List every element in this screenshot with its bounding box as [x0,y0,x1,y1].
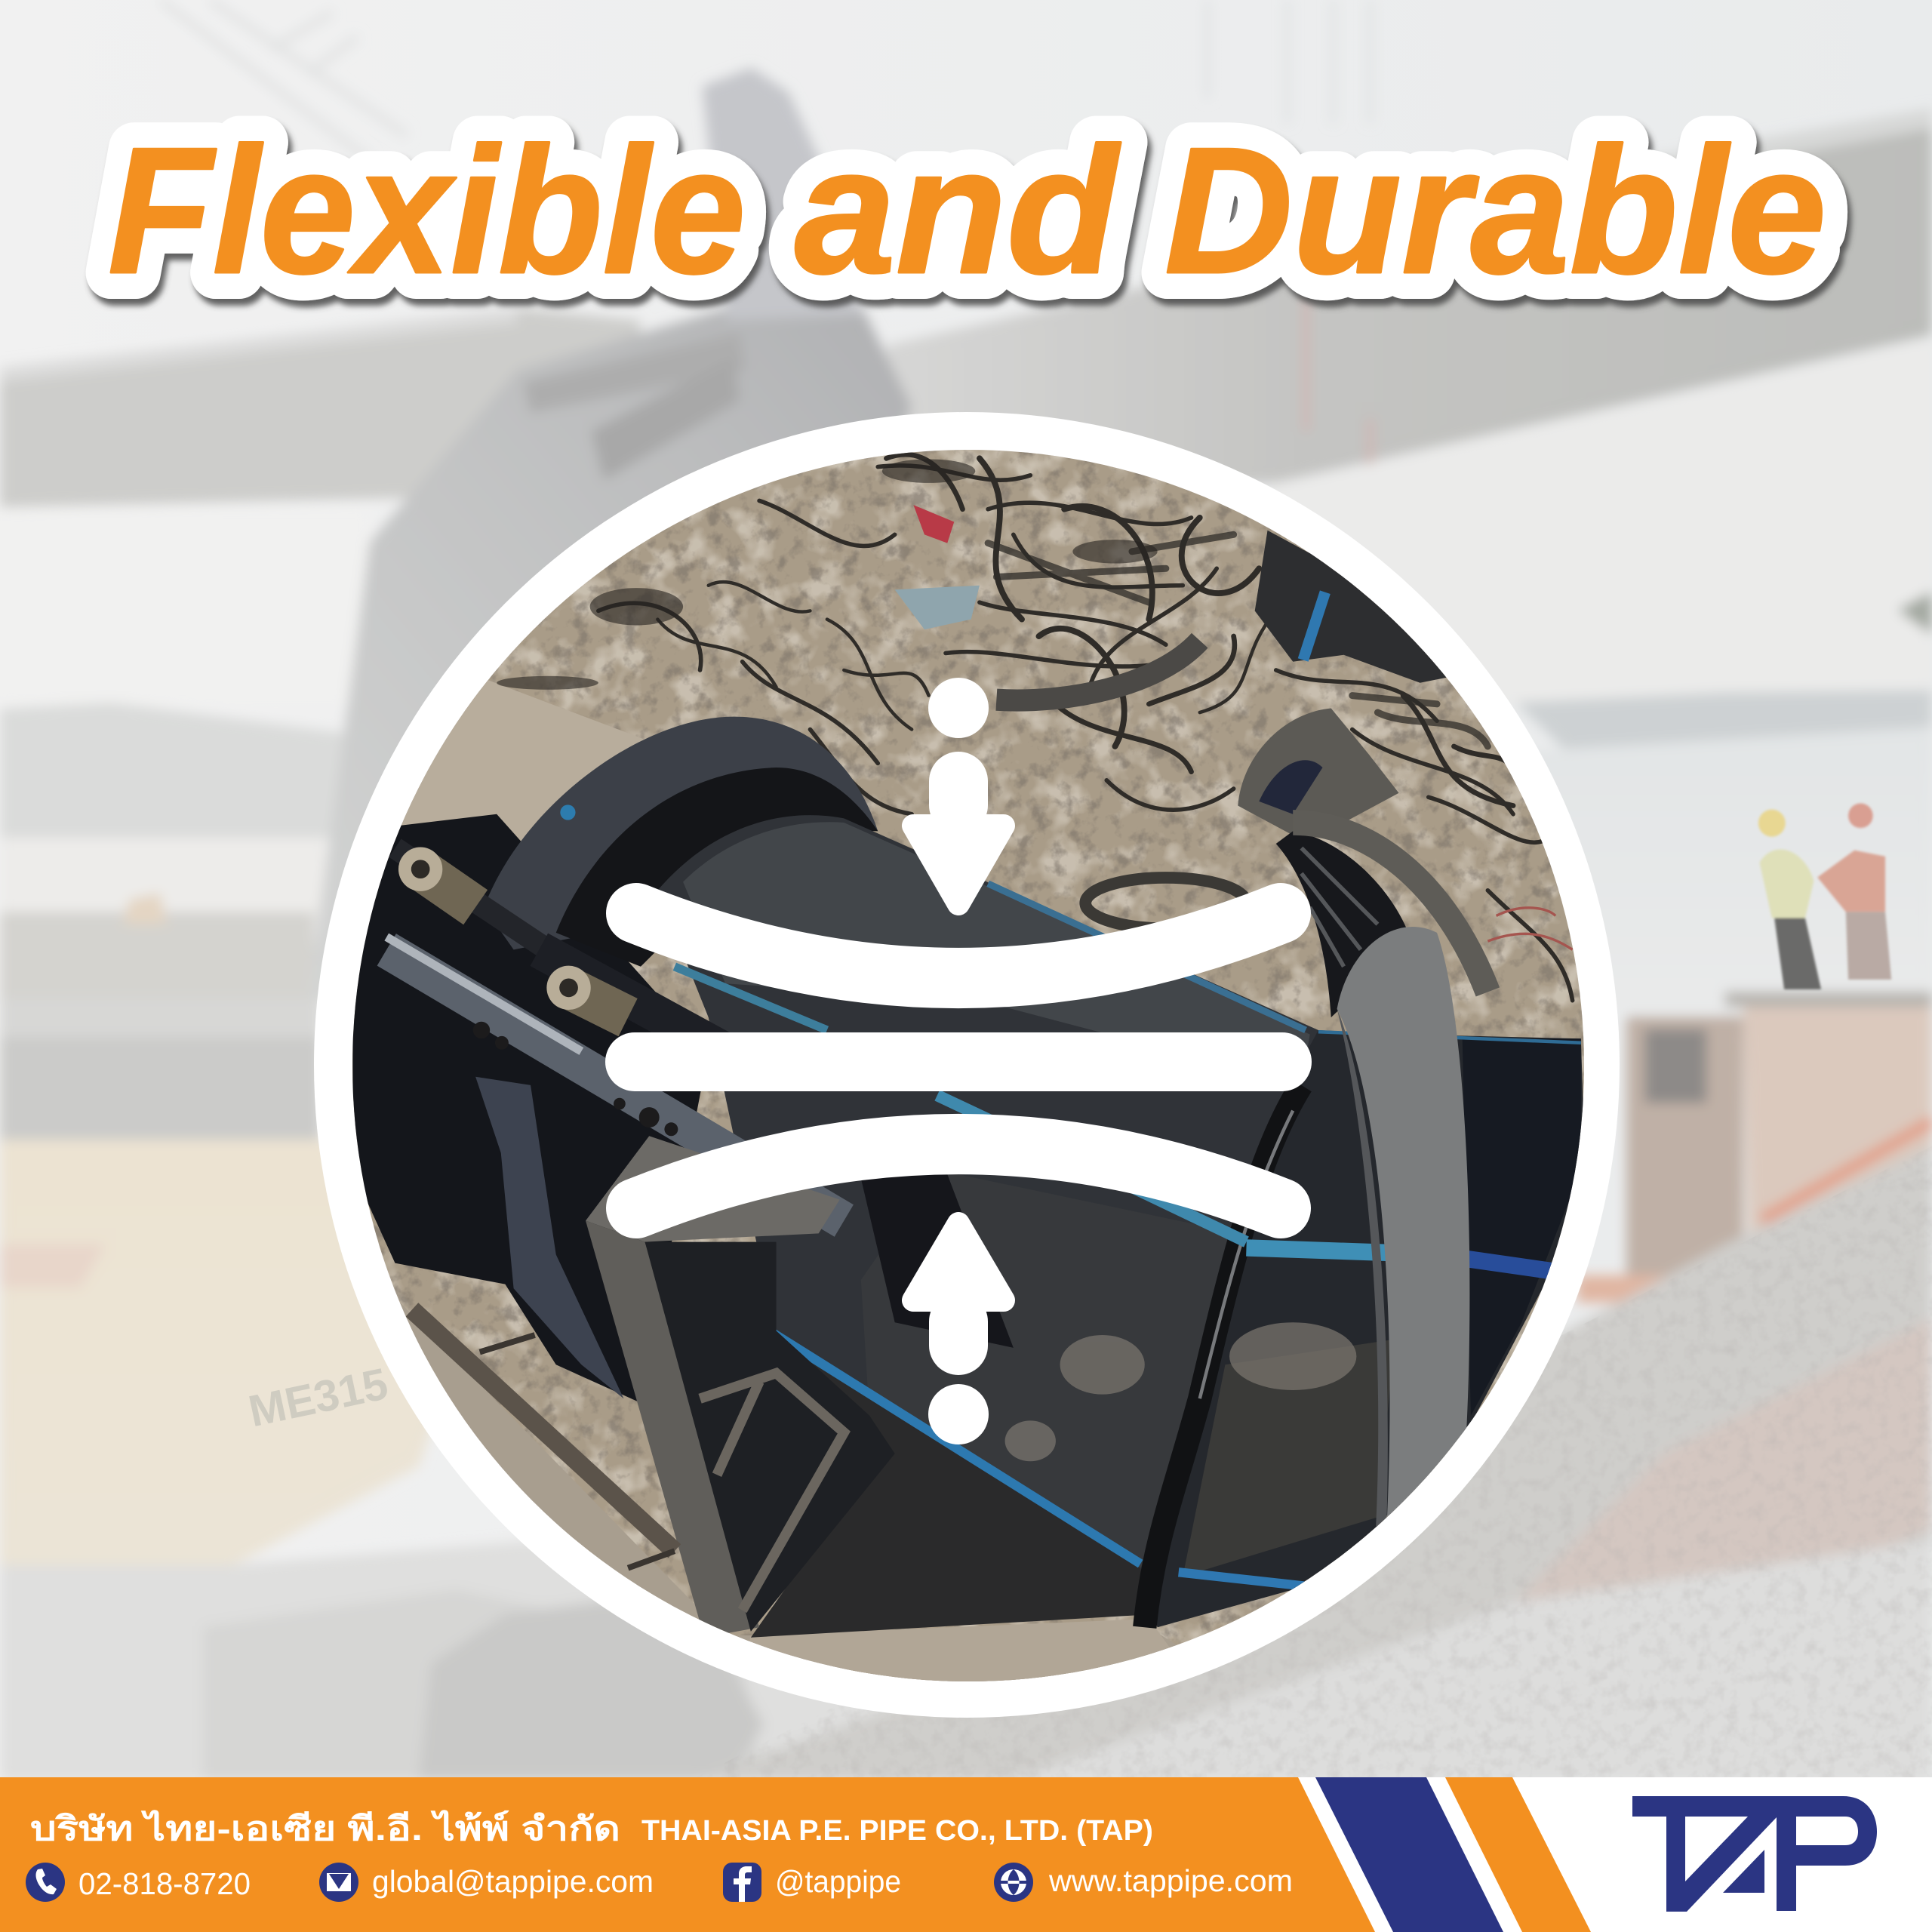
title: Flexible and Durable [108,111,1826,311]
blue-grey bag [895,586,980,629]
pipe underside and shadow [751,1335,1149,1638]
rail holes [473,1022,678,1136]
coil top right [1255,531,1463,683]
title: Flexible and Durable: and [795,111,1121,311]
title: Flexible and Durable: and [795,111,1121,311]
navy stripe [1315,1777,1503,1932]
title: Flexible and Durable: Flexible [108,111,746,311]
scattered wires [598,454,1573,1001]
excavator cab [0,998,321,1152]
gravel slope [690,1146,1932,1780]
phone: 02-818-8720 [78,1866,251,1901]
crane lattice [160,0,1371,160]
dirt clumps [497,459,1158,690]
right bridge [888,109,1932,493]
weld bead [1145,1085,1301,1627]
company name: THAI-ASIA P.E. PIPE CO., LTD. (TAP) [641,1815,1153,1847]
logo: TAP [1632,1796,1877,1912]
facebook [723,1863,901,1902]
phone [26,1863,251,1902]
rod on ground [412,1309,675,1551]
bolts [398,848,628,1017]
workers [1758,804,1891,989]
orange band [0,1777,1375,1932]
website: www.tappipe.com [1048,1863,1293,1898]
ring on ground [1085,878,1246,928]
circle white ring [314,412,1620,1718]
icon: compression symbol [605,678,1312,1444]
company name [30,1809,1153,1847]
black drum left end [352,814,709,1403]
blue stripes [675,884,1581,1586]
email: global@tappipe.com [372,1864,654,1899]
far shore right [1515,690,1932,761]
text on excavator body: ME315 [245,1359,392,1436]
arrow pointing up [913,1223,1004,1375]
top curved bar [636,913,1281,978]
middle straight bar [605,1032,1312,1091]
pale slab [398,680,643,841]
gravel texture [690,1146,1932,1780]
tree [1897,592,1932,635]
sky right [1269,339,1932,705]
lower frame [586,1136,840,1242]
title: Flexible and Durable: Flexible [108,111,746,311]
machine [1743,998,1932,1244]
dark bracket [861,1170,1014,1348]
circular photo: HDPE pipe fusion machine [352,450,1584,1681]
second pipe [1140,1030,1585,1627]
grey flange disc [1337,927,1469,1538]
curved ring [996,641,1200,700]
dust marks [1005,1322,1356,1461]
top dot [928,678,989,738]
sky under bridge [0,508,370,705]
company name: บริษัท ไทย-เอเซีย พี.อี. ไพ้พ์ จำกัด [30,1809,620,1847]
main pipe [657,815,1318,1572]
star wheel [1238,708,1399,835]
ground [352,450,1584,1681]
facebook: @tappipe [775,1864,901,1899]
left bridge [0,308,641,508]
bottom dot [928,1384,989,1444]
title: Flexible and Durable: Durable [1164,111,1826,311]
footer contact bar [0,1777,1932,1932]
arrow pointing down [913,752,1004,904]
far shore left [0,703,345,851]
bottom curved bar [636,1144,1281,1208]
fusion machine rail [386,949,844,1221]
pipe clamp ring [484,717,878,949]
title: Flexible and Durable: Durable [1164,111,1826,311]
footer white base [0,1777,1932,1932]
orange stripe [1445,1777,1591,1932]
strap [475,1077,624,1398]
excavator boom [308,308,912,1023]
red rag [913,505,954,543]
hook [1306,296,1371,518]
tracks [0,1528,1109,1780]
excavator cream body [0,1140,444,1565]
